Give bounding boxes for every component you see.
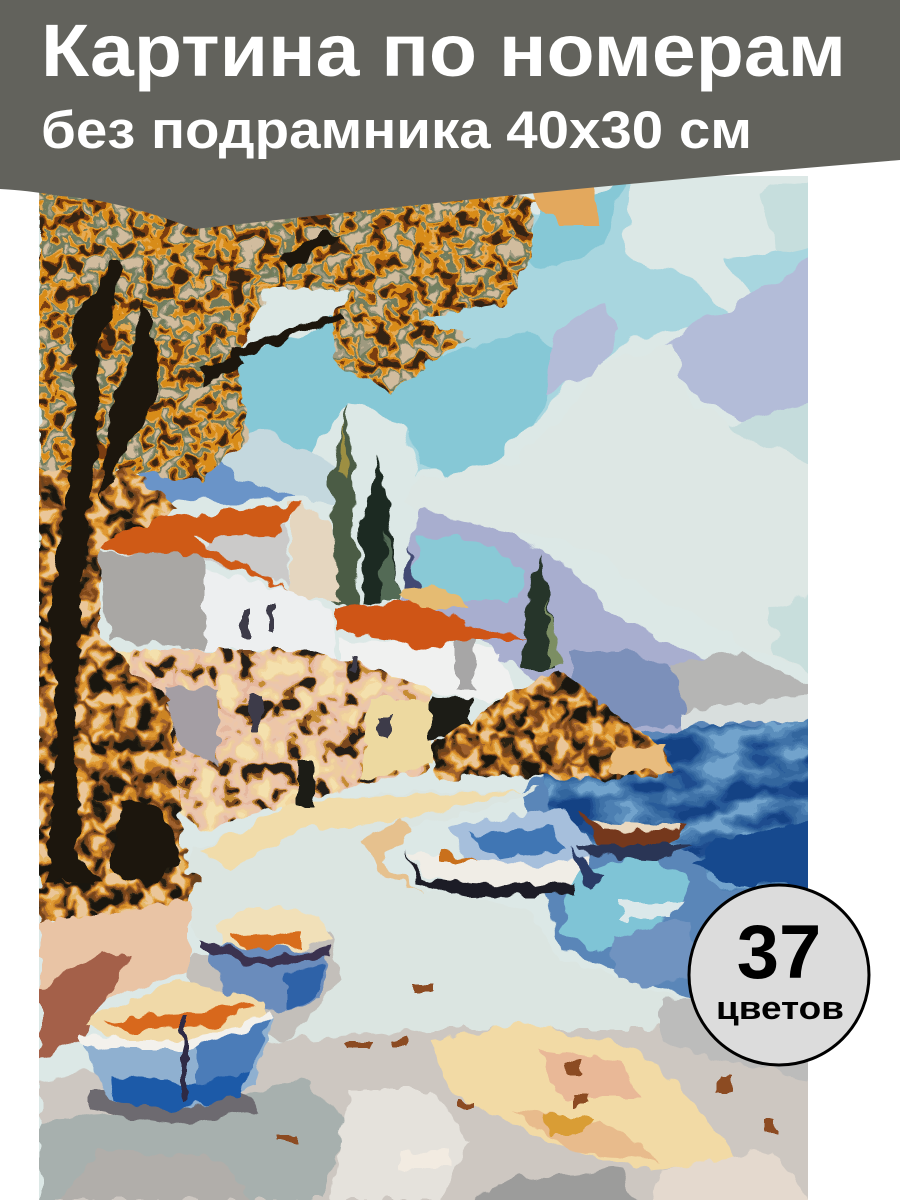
badge: 37 colours: цветов (716, 990, 844, 1026)
badge: 37 colours: 37 (737, 910, 821, 995)
autumn foliage (38, 176, 535, 540)
mountains (400, 510, 820, 740)
distant right-shore shrubs (430, 670, 672, 780)
subtitle: без подрамника 40х30 см (41, 101, 752, 160)
sea (522, 720, 782, 998)
village buildings (95, 500, 525, 700)
rowing boat, front (78, 980, 275, 1125)
sky and clouds (120, 176, 820, 680)
title: Картина по номерам (41, 9, 846, 92)
pale tree patch near the sky (533, 187, 600, 226)
shore path and ground (40, 790, 820, 1200)
badge: 37 colours (689, 885, 869, 1065)
trunks and branches (48, 230, 345, 885)
village walls and mottled shrubs (110, 650, 430, 830)
mottled water (540, 722, 820, 890)
boat on the water (575, 812, 690, 860)
rowing boat, rear (200, 905, 332, 1012)
header banner (0, 0, 900, 229)
left lower shrubs (38, 470, 200, 950)
cypress trees (330, 405, 562, 670)
white boat on the shore (405, 845, 605, 897)
painting: seaside village (38, 176, 820, 1200)
